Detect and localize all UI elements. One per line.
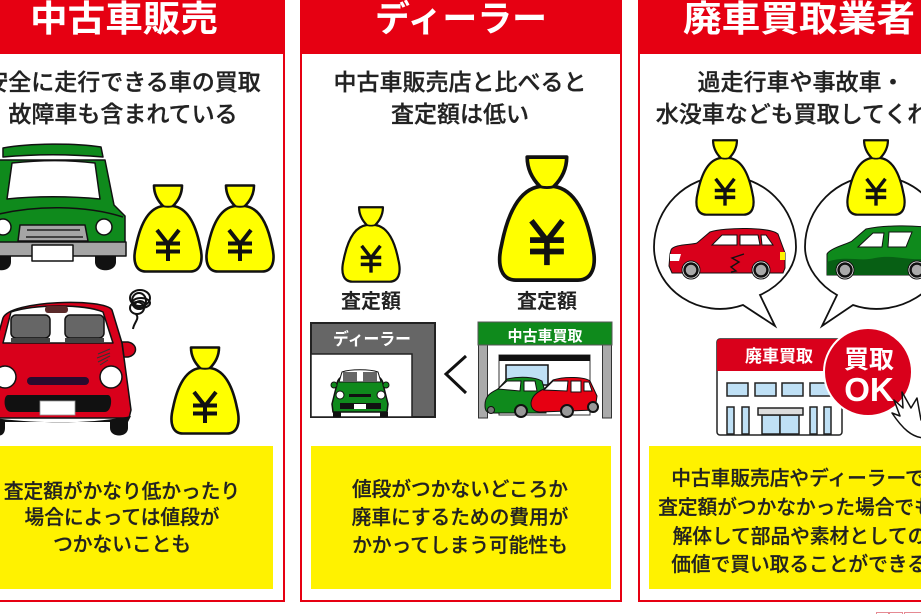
panel: dealership — [300, 0, 622, 601]
icon: money bag — [847, 140, 905, 215]
icon: damaged red car — [0, 302, 136, 436]
icon: scrap buyer shop: 廃車買取 — [745, 347, 813, 366]
icon: used car shop: 中古車買取 — [507, 328, 583, 345]
heading: used car dealer — [0, 0, 284, 54]
icon: scribble — [130, 290, 150, 329]
panel: used car dealer — [0, 0, 284, 601]
callout: used car dealer note — [0, 446, 273, 589]
badge: purchase OK — [824, 328, 912, 416]
text block: dealership intro — [334, 69, 586, 127]
icon: dealer building: ディーラー — [333, 329, 411, 349]
icon: red used car — [531, 377, 598, 417]
speech bubble: green car — [805, 176, 921, 326]
icon: hand pointing — [892, 392, 921, 438]
callout: used car dealer note: 査定額がかなり低かったり — [4, 481, 240, 503]
callout: scrap buyer note — [649, 446, 921, 589]
heading: scrap car buyer — [638, 0, 921, 54]
panel: scrap car buyer — [638, 0, 921, 601]
text block: used car dealer intro: 故障車も含まれている — [8, 101, 238, 127]
icon: dealer building — [311, 323, 435, 417]
icon: money bag — [134, 186, 202, 272]
icon: damaged red car — [669, 228, 785, 279]
label: used car assessment: 査定額 — [517, 290, 577, 313]
callout: scrap buyer note: 中古車販売店やディーラーで — [671, 467, 921, 490]
speech bubble: red car — [654, 176, 796, 326]
icon: used car shop — [478, 322, 612, 418]
arrow: less than — [446, 356, 466, 393]
icon: scrap buyer shop — [717, 339, 842, 435]
callout: dealership note: 値段がつかないどころか — [352, 479, 568, 501]
callout: dealership note: 廃車にするための費用が — [352, 507, 569, 529]
callout: used car dealer note: 場合によっては値段が — [25, 507, 220, 529]
text block: dealership intro: 中古車販売店と比べると — [334, 69, 586, 95]
callout: dealership note — [311, 446, 611, 589]
text block: used car dealer intro — [0, 69, 261, 127]
icon: small money bag — [342, 207, 400, 282]
icon: large money bag — [500, 157, 594, 280]
text block: dealership intro: 査定額は低い — [391, 101, 529, 127]
icon: money bag — [696, 140, 754, 215]
icon: green used car — [485, 377, 546, 417]
callout: used car dealer note: つかないことも — [53, 534, 191, 556]
callout: dealership note: かかってしまう可能性も — [352, 535, 568, 557]
icon: money bag — [171, 348, 239, 434]
icon: dealer small green car — [331, 370, 389, 417]
heading: dealership — [300, 0, 622, 54]
badge: purchase OK: 買取 — [844, 346, 894, 374]
callout: scrap buyer note: 価値で買い取ることができる — [671, 554, 921, 576]
icon: corner marks — [876, 612, 921, 614]
label: dealer assessment: 査定額 — [341, 290, 401, 313]
icon: money bag — [206, 186, 274, 272]
icon: green car — [0, 144, 126, 270]
text block: scrap buyer intro: 過走行車や事故車・ — [698, 69, 904, 95]
badge: purchase OK: OK — [844, 371, 894, 408]
text block: scrap buyer intro — [656, 69, 921, 127]
icon: flooded green car — [827, 226, 921, 279]
callout: scrap buyer note: 解体して部品や素材としての — [673, 526, 921, 548]
